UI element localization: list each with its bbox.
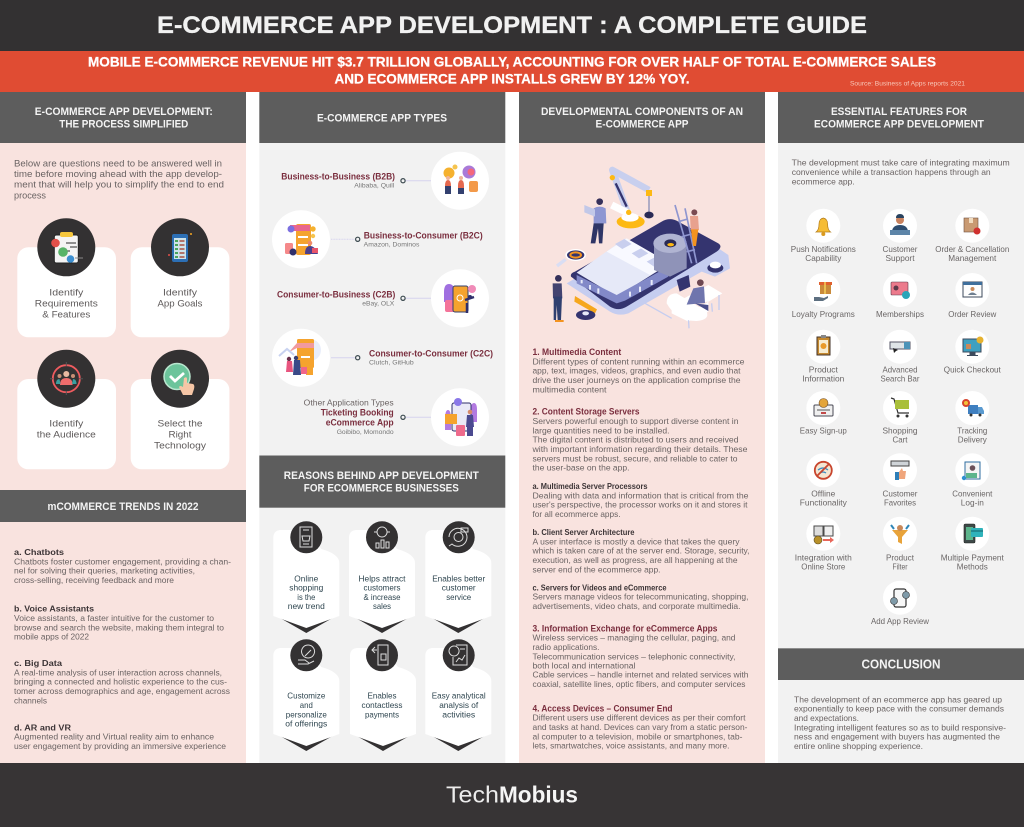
card: select the right technology: Technology	[154, 440, 206, 451]
card: customize offerings: and	[300, 700, 313, 710]
feature: shopping cart	[882, 391, 918, 445]
trend: chatbots: cross-selling, receiving feedback and more	[14, 575, 174, 585]
feature: order review: Order Review	[948, 310, 996, 319]
type: business to consumer: Business-to-Consumer (B2C)	[364, 229, 483, 240]
feature: loyalty programs	[792, 273, 855, 319]
card: contactless payments: Enables	[368, 691, 396, 701]
card: identify requirements: Requirements	[35, 298, 98, 309]
card: better customer service	[425, 521, 491, 633]
red statistic banner: MOBILE E-COMMERCE REVENUE HIT $3.7 TRILLION GLOBALLY, ACCOUNTING FOR OVER HALF OF TOTAL E-COMMERCE SALES	[88, 55, 936, 70]
card: identify requirements	[17, 218, 116, 337]
feature: loyalty programs: Loyalty Programs	[792, 310, 855, 319]
component: multimedia server processors: user's perspective, the processor works on it and stores it	[532, 500, 748, 510]
trend: voice assistants: browse and search the website, making them integral to	[14, 622, 224, 632]
component: content storage servers: The digital content is distributed to users and received	[532, 435, 739, 445]
component: content storage servers: servers must be robust, secure, and reliable to cater to	[532, 453, 738, 463]
component: servers for videos: advertisements, video chats, and corporate multimedia.	[532, 601, 740, 611]
feature: shopping cart: Shopping	[882, 427, 918, 436]
component: information exchange: 3. Information Exchange for eCommerce Apps	[532, 623, 718, 633]
component: client server architecture	[532, 527, 750, 574]
feature: advanced search bar: Advanced	[882, 366, 918, 375]
component: servers for videos: Servers manage videos for telecommunicating, shopping,	[532, 592, 748, 602]
feature: product information: Product	[809, 366, 839, 375]
card: analytical analysis: activities	[442, 709, 475, 719]
type: ticketing booking: Goibibo, Momondo	[337, 429, 394, 436]
trend: voice assistants: mobile apps of 2022	[14, 632, 89, 642]
intro text: The development must take care of integrating maximum	[792, 158, 1010, 168]
top title banner	[0, 0, 1024, 51]
trend: ar and vr: Augmented reality and Virtual reality aim to enhance	[14, 732, 214, 742]
feature: product filter: Product	[886, 554, 915, 563]
card: helps attract customers: sales	[373, 601, 391, 611]
icon: headset service	[449, 528, 468, 546]
feature: convenient log-in: Convenient	[952, 489, 993, 498]
heading: process simplified: THE PROCESS SIMPLIFIED	[59, 119, 189, 131]
component: servers for videos	[532, 582, 748, 611]
component: client server architecture: b. Client Server Architecture	[532, 527, 635, 537]
component: access devices: and tasks at hand. Devices can vary from a static person-	[532, 722, 748, 732]
component: information exchange	[532, 623, 749, 689]
intro text: ment that will help you to simplify the end to end	[14, 179, 224, 190]
top title banner: E-COMMERCE APP DEVELOPMENT : A COMPLETE GUIDE	[157, 12, 867, 39]
card: analytical analysis	[425, 639, 491, 751]
feature: customer support: Support	[886, 254, 915, 263]
footer with logo	[0, 763, 1024, 827]
heading: app types	[259, 92, 505, 143]
icon: analytics sheet	[449, 645, 467, 665]
heading: conclusion	[778, 648, 1024, 680]
type: consumer to consumer	[272, 329, 493, 387]
card: helps attract customers	[349, 521, 415, 633]
feature: customer support	[882, 209, 918, 263]
feature: order and cancellation	[935, 209, 1010, 263]
card: identify the audience: Identify	[49, 418, 84, 429]
component: multimedia content	[532, 347, 745, 394]
component: client server architecture: execution, as well as progress, are all happening at the	[532, 555, 738, 565]
component: information exchange: Telecommunication services – telephonic connectivity,	[532, 651, 736, 661]
feature: order and cancellation: Management	[948, 254, 997, 263]
heading: reasons: REASONS BEHIND APP DEVELOPMENT	[284, 470, 479, 482]
type: business to business: Business-to-Business (B2B)	[281, 170, 395, 181]
type: consumer to consumer: Consumer-to-Consumer (C2C)	[369, 348, 493, 359]
feature: multiple payment methods	[941, 517, 1005, 572]
feature: customer favorites: Customer	[882, 489, 918, 498]
heading: essential features: ECOMMERCE APP DEVELOPMENT	[814, 119, 985, 131]
component: content storage servers	[531, 407, 748, 473]
component: content storage servers: large quantities need to be installed.	[532, 425, 670, 435]
trend: ar and vr: user engagement by providing an immersive experience	[14, 741, 226, 751]
component: access devices: lets, smartwatches, voice assistants, and many more.	[532, 740, 730, 750]
illustration: isometric phone with robot arm and workers	[553, 170, 730, 328]
icon: check with hand	[164, 364, 194, 395]
card: select the right technology: Right	[168, 429, 192, 440]
feature: order review	[948, 273, 996, 319]
feature: offline functionality: Functionality	[800, 498, 848, 507]
trend: chatbots: Chatbots foster customer engagement, providing a chan-	[14, 556, 231, 566]
heading: reasons	[259, 456, 505, 508]
feature: advanced search bar	[880, 330, 920, 383]
component: information exchange: coaxial, satellite lines, optic fibers, and computer services	[532, 679, 746, 689]
component: content storage servers: with important information regarding their details. These	[531, 444, 748, 454]
trend: voice assistants: Voice assistants, a faster intuitive for the customer to	[14, 613, 214, 623]
conclusion text: entire online shopping experience.	[794, 741, 923, 751]
feature: memberships: Memberships	[876, 310, 924, 319]
component: content storage servers: Servers powerful enough to support diverse content in	[532, 416, 739, 426]
heading: essential features: ESSENTIAL FEATURES FOR	[831, 106, 967, 118]
type: business to business: Alibaba, Quill	[354, 183, 395, 190]
feature: integration with online store	[795, 517, 852, 572]
card: helps attract customers: Helps attract	[358, 573, 406, 583]
trend: chatbots: nel for solving their queries, marketing activities,	[14, 566, 195, 576]
trend: big data: tomer across demographics and age, engagement across	[14, 686, 230, 696]
icon: b2c storefront	[285, 224, 318, 256]
component: multimedia content: drive the user journeys on the application comprise the	[532, 375, 741, 385]
type: consumer to business: eBay, OLX	[362, 300, 395, 307]
card: identify app goals	[131, 218, 229, 337]
feature: quick checkout: Quick Checkout	[944, 366, 1002, 375]
component: content storage servers: the user-base on the app.	[532, 463, 630, 473]
card: customize offerings: of offerings	[285, 718, 327, 728]
trend: big data: channels	[14, 695, 47, 705]
feature: product information	[802, 330, 845, 383]
component: servers for videos: c. Servers for Videos and eCommerce	[532, 582, 667, 592]
trend: voice assistants	[14, 604, 224, 642]
card: better customer service: Enables better	[432, 573, 485, 583]
component: access devices: Different users use different devices as per their comfort	[532, 713, 746, 723]
panel: mcommerce trends	[0, 490, 246, 763]
red statistic banner: AND ECOMMERCE APP INSTALLS GREW BY 12% YOY.	[334, 71, 690, 86]
feature: add app review: Add App Review	[871, 617, 929, 626]
feature: tracking delivery	[955, 391, 989, 445]
component: access devices	[532, 703, 748, 750]
icon: coin with bars	[374, 527, 390, 548]
trend: voice assistants: b. Voice Assistants	[14, 604, 94, 614]
component: access devices: al computer to a television, mobile or smartphones, tab-	[532, 731, 743, 741]
type: ticketing booking: Ticketing Booking	[321, 406, 394, 417]
trend: big data: A real-time analysis of user interaction across channels,	[14, 667, 222, 677]
trend: big data: bringing a connected and holistic experience to the cus-	[14, 677, 227, 687]
heading: process simplified	[0, 92, 246, 143]
feature: push notifications	[791, 209, 856, 263]
card: contactless payments: payments	[365, 709, 399, 719]
component: multimedia content: Different types of content running within an ecommerce	[532, 356, 745, 366]
footer with logo: Tech	[446, 782, 499, 808]
type: business to business	[281, 152, 489, 210]
intro text	[792, 158, 1010, 186]
trend: big data	[14, 658, 230, 705]
card: helps attract customers: & increase	[364, 592, 401, 602]
card: online shopping	[273, 521, 339, 633]
conclusion text: The development of an ecommerce app has geared up	[794, 694, 1002, 704]
heading: app types: E-COMMERCE APP TYPES	[317, 112, 447, 124]
card: online shopping: Online	[294, 573, 319, 583]
feature: offline functionality	[800, 453, 848, 507]
feature: easy sign-up: Easy Sign-up	[800, 427, 847, 436]
feature: add app review	[871, 581, 929, 626]
card: analytical analysis: Easy analytical	[432, 691, 486, 701]
feature: customer favorites	[882, 453, 918, 507]
icon: audience target	[50, 362, 83, 395]
component: access devices: 4. Access Devices – Consumer End	[532, 703, 672, 713]
type: ticketing booking: Other Application Types	[304, 398, 394, 407]
card: better customer service: service	[446, 592, 471, 602]
heading: developmental components	[519, 92, 765, 143]
icon: clipboard	[51, 232, 83, 263]
card: select the right technology: Select the	[158, 418, 202, 429]
component: multimedia server processors	[532, 481, 749, 519]
icon: hand with percent	[298, 645, 315, 664]
feature: shopping cart: Cart	[892, 436, 908, 445]
panel: developmental components	[519, 92, 765, 763]
type: business to consumer: Amazon, Dominos	[364, 241, 420, 248]
panel: app types	[259, 92, 505, 456]
feature: tracking delivery: Tracking	[957, 427, 988, 436]
intro text: time before moving ahead with the app develop-	[14, 168, 222, 179]
intro text: ecommerce app.	[792, 176, 855, 186]
conclusion text: Integrating intelligent features so as to build responsive-	[794, 722, 1006, 732]
heading: essential features	[778, 92, 1024, 143]
heading: developmental components: E-COMMERCE APP	[596, 119, 688, 131]
feature: order and cancellation: Order & Cancellation	[935, 245, 1010, 254]
card: customize offerings: personalize	[286, 709, 327, 719]
trend: ar and vr: d. AR and VR	[14, 722, 72, 732]
card: identify requirements: Identify	[49, 287, 84, 298]
feature: quick checkout	[944, 330, 1002, 375]
panel: the process simplified	[0, 92, 246, 490]
component: information exchange: Cable services – handle internet and related services with	[532, 670, 749, 680]
heading: mcommerce trends: mCOMMERCE TRENDS IN 2022	[48, 501, 199, 513]
type: consumer to consumer: Clutch, GitHub	[369, 360, 414, 367]
type: ticketing booking	[304, 388, 489, 446]
component: multimedia content: 1. Multimedia Content	[532, 347, 621, 357]
feature: product filter	[883, 517, 917, 572]
feature: tracking delivery: Delivery	[958, 436, 988, 445]
component: information exchange: radio applications.	[532, 642, 600, 652]
feature: customer support: Customer	[882, 245, 918, 254]
panel: reasons behind app development	[259, 456, 505, 763]
intro text	[14, 157, 224, 200]
icon: phone cart	[300, 527, 312, 547]
trend: big data: c. Big Data	[14, 658, 62, 668]
card: identify the audience: the Audience	[37, 429, 96, 440]
conclusion text: ness and engagement with buyers has augmented the	[794, 732, 1000, 742]
feature: product filter: Filter	[892, 563, 908, 572]
intro text: process	[14, 189, 46, 200]
trend: chatbots	[14, 547, 231, 585]
component: information exchange: both local and international	[532, 660, 636, 670]
component: multimedia content: multimedia content	[532, 384, 607, 394]
red statistic banner	[0, 51, 1024, 92]
card: identify app goals: Identify	[163, 287, 197, 298]
card: online shopping: is the	[297, 592, 315, 602]
conclusion text: and expectations.	[794, 713, 859, 723]
icon: contactless phone	[372, 645, 388, 665]
trend: ar and vr	[14, 722, 226, 751]
component: client server architecture: A user interface is mostly a device that takes the query	[532, 536, 740, 546]
component: information exchange: Wireless services – managing the cellular, paging, and	[532, 633, 736, 643]
card: better customer service: customer	[442, 583, 476, 593]
conclusion text: exponentially to keep pace with the consumer demands	[794, 704, 1004, 714]
heading: conclusion: CONCLUSION	[862, 656, 940, 671]
card: analytical analysis: analysis of	[439, 700, 479, 710]
icon: c2b phone shop	[444, 284, 476, 313]
icon: phone checklist	[168, 233, 192, 262]
heading: developmental components: DEVELOPMENTAL COMPONENTS OF AN	[541, 106, 743, 118]
icon: c2c storefront	[279, 339, 321, 375]
card: contactless payments: contactless	[362, 700, 402, 710]
red statistic banner: Source: Business of Apps reports 2021	[850, 80, 965, 88]
feature: advanced search bar: Search Bar	[880, 374, 920, 383]
card: identify requirements: & Features	[42, 309, 90, 320]
feature: product information: Information	[802, 374, 845, 383]
component: multimedia content: app, text, images, videos, graphics, and even audio that	[532, 366, 741, 376]
card: select the right technology	[131, 350, 229, 469]
feature: memberships	[876, 273, 924, 319]
type: consumer to business	[277, 269, 489, 327]
panel: conclusion	[778, 648, 1024, 763]
icon: b2b handshake	[444, 164, 478, 194]
card: contactless payments	[350, 639, 416, 751]
feature: offline functionality: Offline	[811, 489, 836, 498]
icon: ticket booking	[445, 398, 477, 436]
trend: chatbots: a. Chatbots	[14, 547, 64, 557]
feature: integration with online store: Integration with	[795, 554, 852, 563]
card: customize offerings	[273, 639, 339, 751]
feature: push notifications: Push Notifications	[791, 245, 856, 254]
footer with logo: Mobius	[499, 782, 578, 808]
feature: convenient log-in: Log-in	[961, 498, 984, 507]
component: multimedia server processors: a. Multimedia Server Processors	[532, 481, 648, 491]
feature: easy sign-up	[800, 391, 847, 436]
component: client server architecture: which is taken care of at the server end. Storage, security,	[532, 546, 750, 556]
component: multimedia server processors: for all ecommerce apps.	[532, 509, 620, 519]
component: multimedia server processors: Dealing with data and information that is critical from the	[532, 490, 749, 500]
feature: integration with online store: Online Store	[801, 563, 846, 572]
feature: multiple payment methods: Methods	[957, 563, 988, 572]
feature: push notifications: Capability	[805, 254, 842, 263]
heading: reasons: FOR ECOMMERCE BUSINESSES	[304, 482, 459, 494]
type: ticketing booking: eCommerce App	[326, 417, 394, 428]
feature: convenient log-in	[952, 453, 993, 507]
feature: customer favorites: Favorites	[884, 498, 916, 507]
heading: mcommerce trends	[0, 490, 246, 522]
type: consumer to business: Consumer-to-Business (C2B)	[277, 288, 395, 299]
intro text: Below are questions need to be answered well in	[14, 157, 222, 168]
card: online shopping: shopping	[289, 583, 324, 593]
heading: process simplified: E-COMMERCE APP DEVELOPMENT:	[35, 106, 213, 118]
intro text: convenience while a transaction happens through an	[792, 167, 991, 177]
card: customize offerings: Customize	[287, 691, 326, 701]
panel: essential features	[778, 92, 1024, 648]
card: helps attract customers: customers	[364, 583, 400, 593]
conclusion text	[794, 694, 1006, 751]
component: client server architecture: server end of the ecommerce app.	[532, 564, 660, 574]
card: online shopping: new trend	[288, 601, 325, 611]
card: identify app goals: App Goals	[158, 298, 203, 309]
feature: multiple payment methods: Multiple Payment	[941, 554, 1005, 563]
component: content storage servers: 2. Content Storage Servers	[532, 407, 640, 417]
type: business to consumer	[272, 210, 483, 268]
card: identify the audience	[17, 350, 116, 469]
